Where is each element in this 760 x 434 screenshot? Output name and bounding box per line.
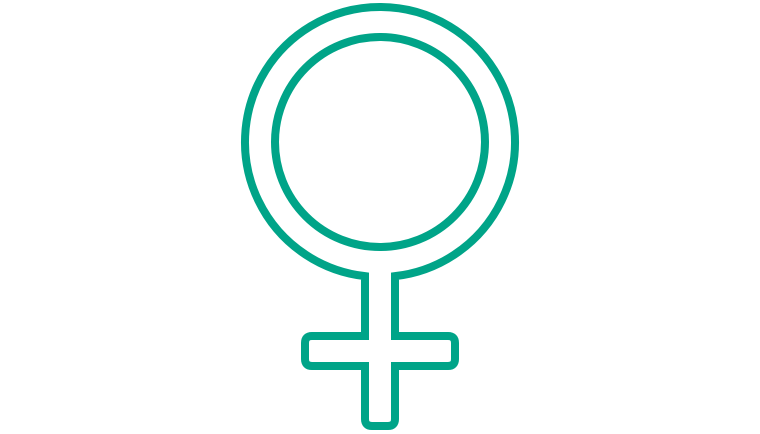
icon part: inner circle xyxy=(275,37,485,247)
icon part: outer circle with stem and cross outline xyxy=(245,7,515,426)
